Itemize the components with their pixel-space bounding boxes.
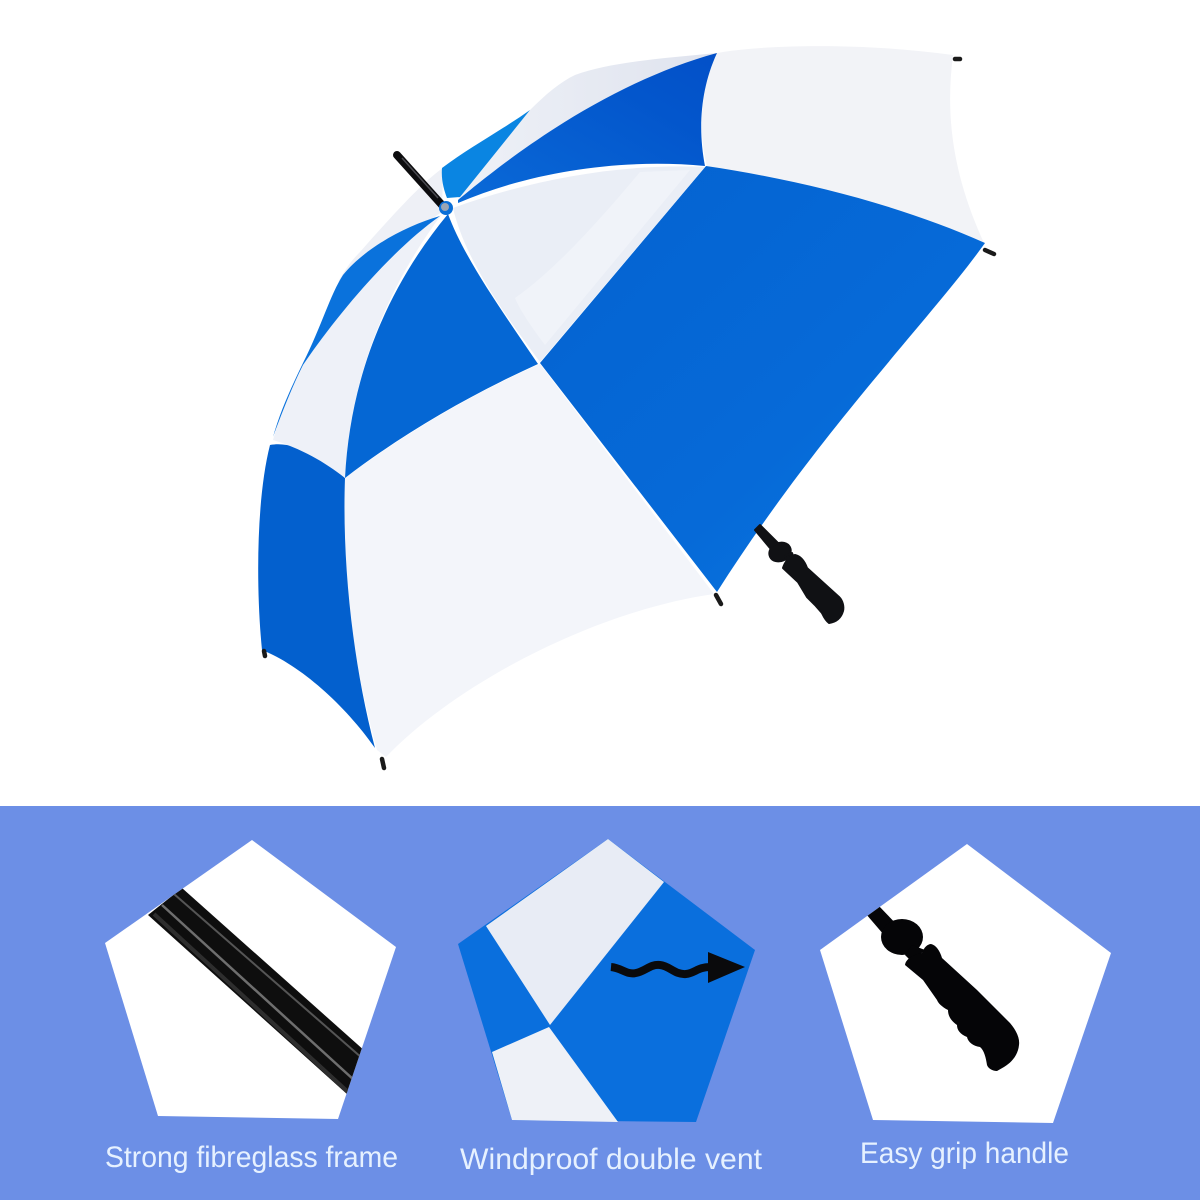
panel: fibreglass frame [105, 840, 396, 1119]
canopy panel: top right white [702, 46, 985, 245]
label: double vent: Windproof double vent [460, 1143, 763, 1176]
canopy panel: top light-blue wedge [442, 110, 530, 198]
rib tips [264, 59, 994, 768]
fibreglass rods [148, 888, 366, 1095]
canopy fold highlight [515, 170, 690, 345]
pentagon: white background [820, 844, 1111, 1123]
label: fibreglass frame: Strong fibreglass frame [105, 1141, 398, 1174]
pentagon: white background [105, 840, 396, 1119]
top handle ferrule [397, 155, 442, 205]
vent white upper [486, 839, 664, 1025]
canopy panel: lower left blue [258, 444, 375, 748]
vent white lower [492, 1027, 618, 1122]
panel: double vent [458, 839, 755, 1122]
blue feature band [0, 806, 1200, 1200]
umbrella product photo [258, 46, 994, 768]
pentagon: blue base [458, 839, 755, 1122]
canopy panel: large white lower [343, 364, 714, 757]
panel: grip handle [820, 844, 1111, 1123]
bottom handle [755, 525, 843, 623]
hub [439, 201, 453, 215]
canopy panel: left white ribbon [273, 214, 442, 478]
canopy panel: top white strip [458, 53, 717, 200]
canopy panel: center left blue [345, 214, 538, 478]
label: grip handle: Easy grip handle [860, 1137, 1069, 1170]
wind arrow [611, 952, 745, 983]
canopy panel: center white [453, 166, 705, 362]
canopy panel: upper white wedge near handle [338, 168, 443, 282]
canopy panel: top blue [458, 53, 717, 203]
handle [866, 905, 1019, 1071]
canopy panel: large blue [540, 166, 985, 592]
canopy panel: upper left blue [273, 216, 440, 437]
